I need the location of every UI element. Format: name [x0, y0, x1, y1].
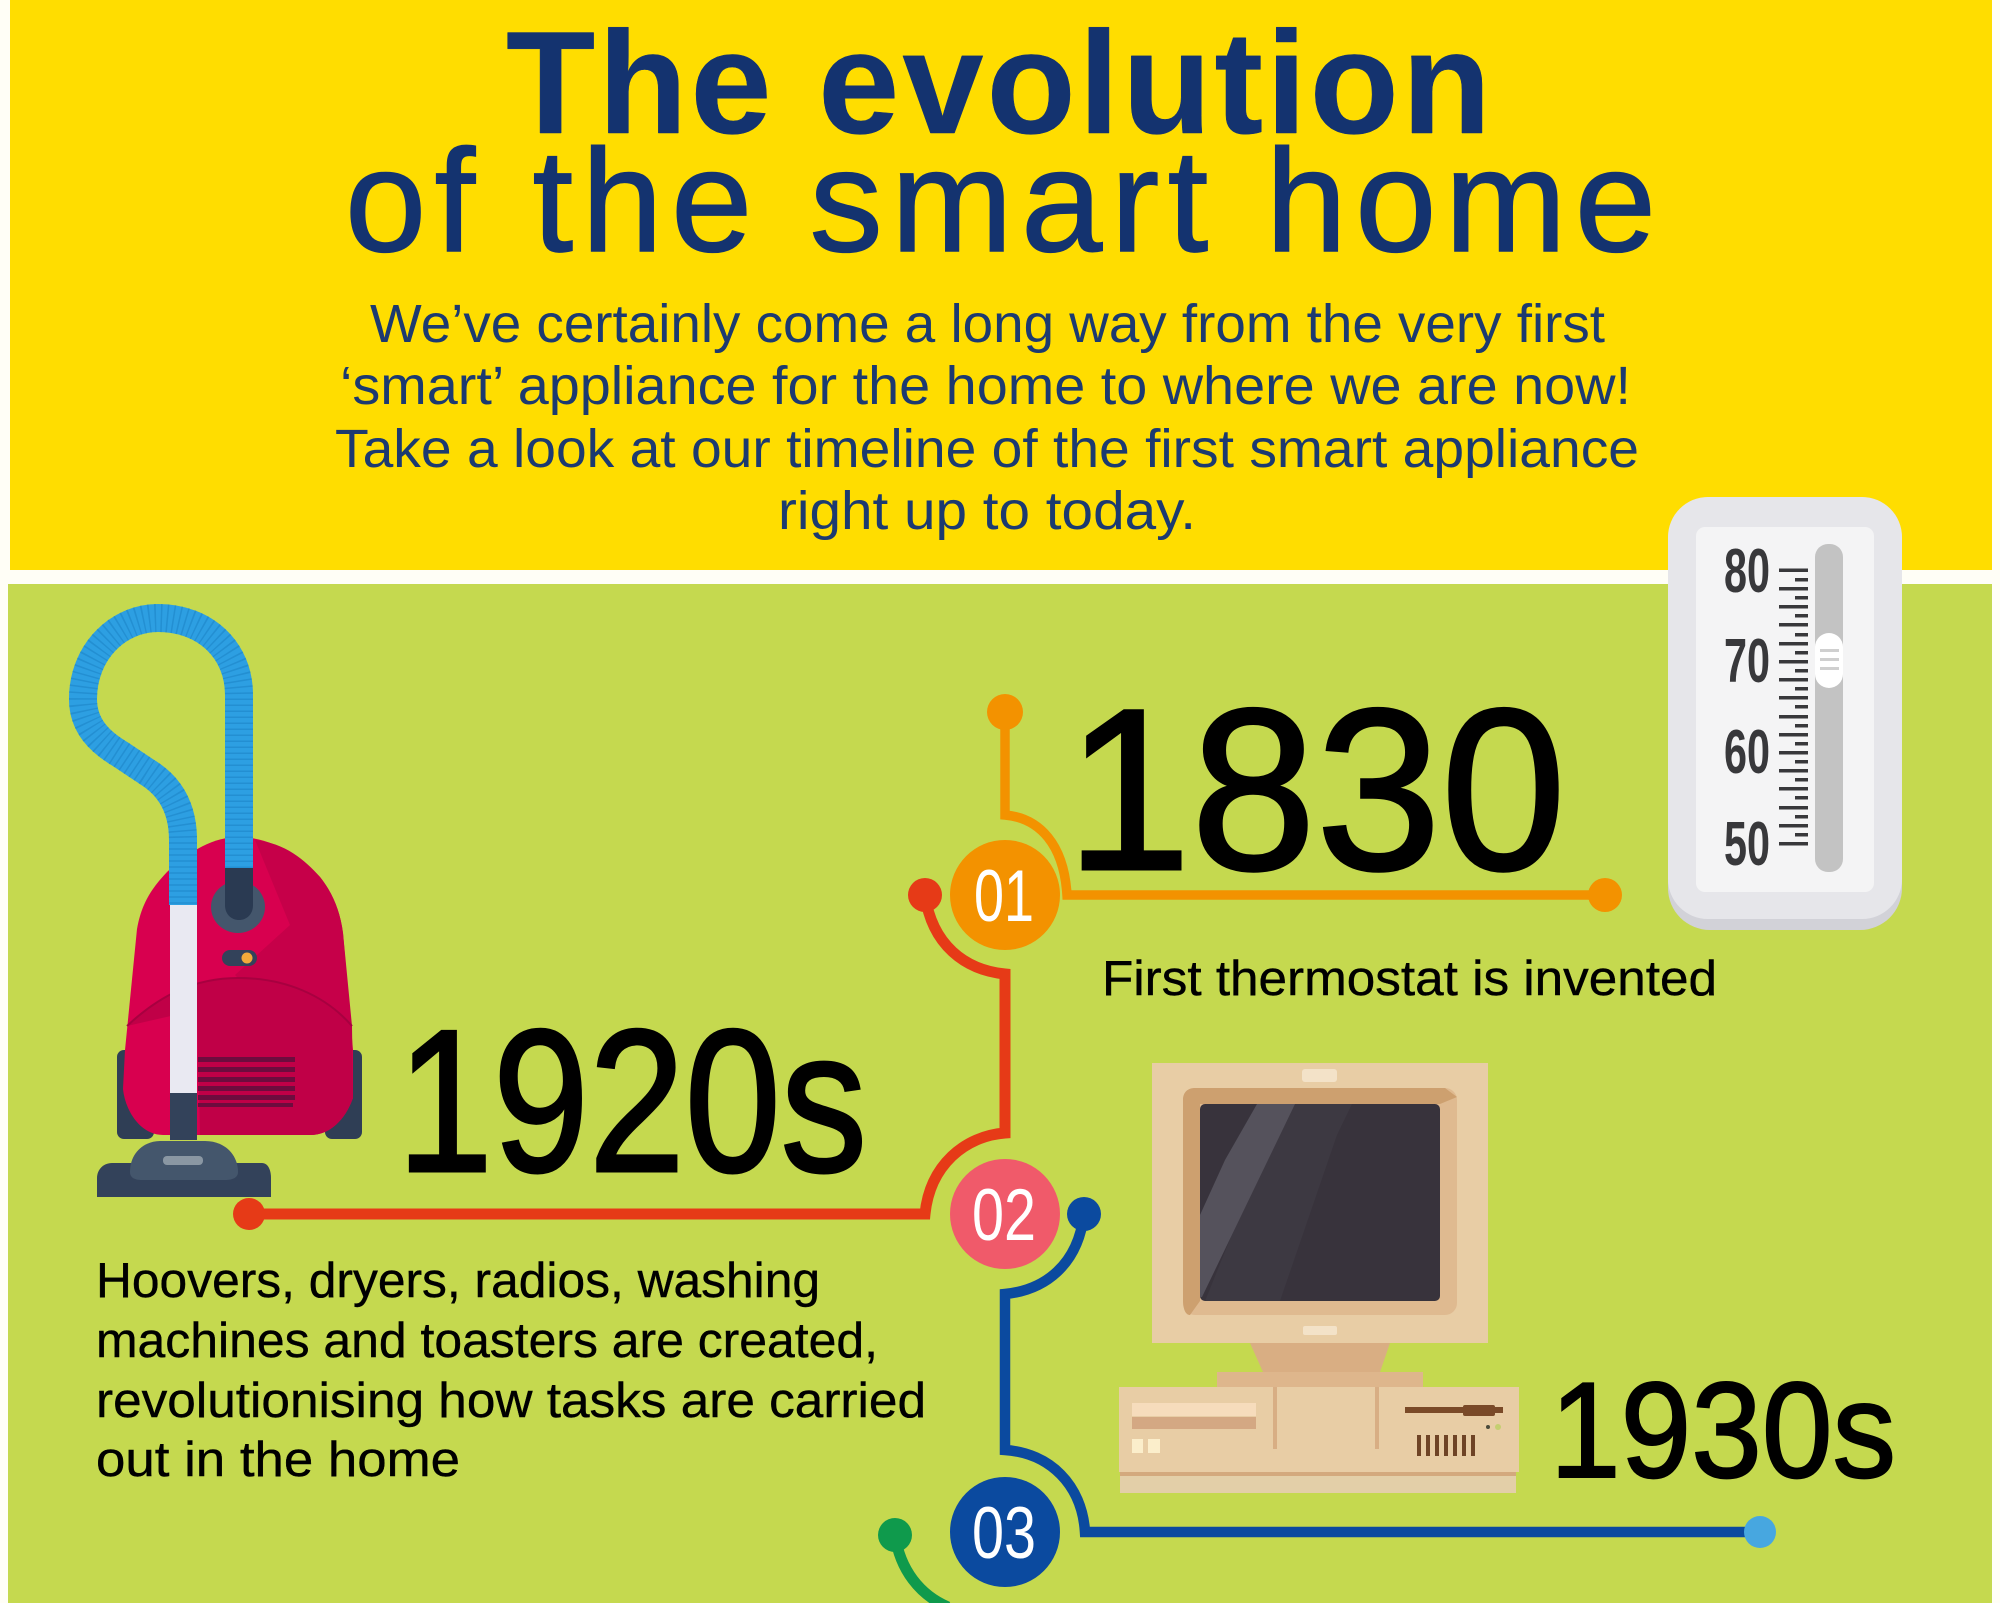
thermostat ticks: [1779, 568, 1808, 846]
icon: retro computer: [1119, 1063, 1519, 1493]
intro text: [335, 294, 1639, 541]
intro text: Take a look at our timeline of the first smart appliance: [335, 419, 1639, 479]
intro text: ‘smart’ appliance for the home to where we are now!: [340, 356, 1631, 416]
timeline node 02: 02: [972, 1175, 1036, 1256]
thermostat scale numbers: 70: [1724, 627, 1770, 696]
text: 1920s description: [96, 1254, 926, 1487]
text: 1920s description: Hoovers, dryers, radios, washing: [96, 1254, 820, 1308]
arrow: blue connector 03: [1005, 1197, 1776, 1548]
thermostat scale numbers: 50: [1724, 810, 1770, 879]
timeline node 02: [950, 1159, 1060, 1269]
thermostat scale numbers: [1724, 537, 1770, 879]
timeline node 01: [950, 840, 1060, 950]
text: 1920s description: revolutionising how tasks are carried: [96, 1374, 926, 1428]
icon: thermostat: [1668, 497, 1902, 930]
title: The evolution: [506, 1, 1491, 164]
timeline node 03: [950, 1477, 1060, 1587]
arrow: green connector 04: [878, 1518, 948, 1603]
panel: yellow header: [10, 0, 1992, 570]
timeline node 03: 03: [972, 1493, 1036, 1574]
intro text: We’ve certainly come a long way from the very first: [370, 294, 1605, 354]
heading: 1930s: 1930s: [1550, 1354, 1896, 1506]
title: [345, 1, 1656, 282]
title: of the smart home: [345, 119, 1656, 282]
intro text: right up to today.: [778, 481, 1196, 541]
thermostat scale numbers: 60: [1724, 718, 1770, 787]
heading: 1830: 1830: [1066, 661, 1566, 918]
icon: vacuum cleaner: [83, 618, 362, 1197]
heading: 1920s: 1920s: [397, 988, 867, 1215]
arrow: red connector 02: [233, 878, 1005, 1230]
text: 1920s description: machines and toasters are created,: [96, 1314, 878, 1368]
text: 1920s description: out in the home: [96, 1433, 460, 1487]
arrow: orange connector 01: [987, 694, 1622, 912]
panel: green timeline: [8, 584, 1992, 1603]
thermostat knob: [1815, 633, 1843, 688]
thermostat track: [1815, 544, 1843, 872]
text: 1830 description: First thermostat is invented: [1102, 952, 1717, 1006]
thermostat scale numbers: 80: [1724, 537, 1770, 606]
timeline node 01: 01: [974, 856, 1034, 937]
